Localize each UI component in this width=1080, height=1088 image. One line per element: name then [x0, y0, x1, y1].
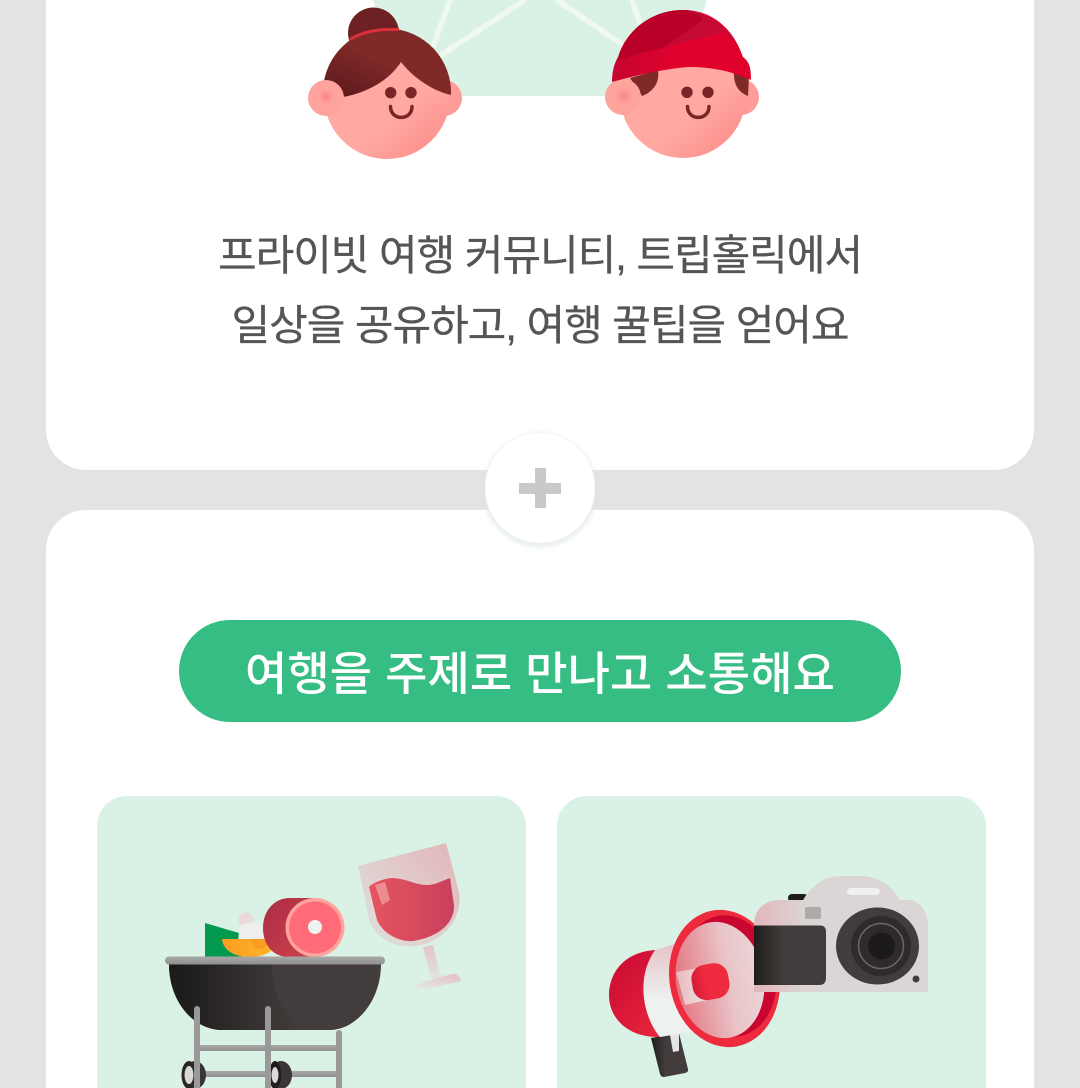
text block: community description: 프라이빗 여행 커뮤니티, 트립홀릭에서 [218, 232, 862, 279]
grill [165, 956, 385, 1088]
heading pill [179, 620, 901, 722]
panel: food tile [97, 796, 526, 1088]
panel: community card [46, 0, 1034, 470]
illustration: megaphone and camera [609, 876, 928, 1077]
text block: community description [218, 232, 862, 349]
man face with beanie [605, 10, 759, 158]
food on grill [205, 898, 344, 957]
green backdrop [373, 0, 707, 96]
illustration: two travellers [308, 0, 759, 159]
megaphone [609, 901, 791, 1077]
panel: meetup card [46, 510, 1034, 1088]
text block: community description: 일상을 공유하고, 여행 꿀팁을 얻어요 [232, 302, 848, 349]
camera [754, 876, 928, 992]
plus connector [485, 432, 595, 548]
heading pill: 여행을 주제로 만나고 소통해요 [245, 648, 835, 700]
wine glass [358, 843, 461, 990]
panel: media tile [557, 796, 986, 1088]
illustration: grill and wine [165, 843, 461, 1088]
woman face [308, 8, 462, 159]
